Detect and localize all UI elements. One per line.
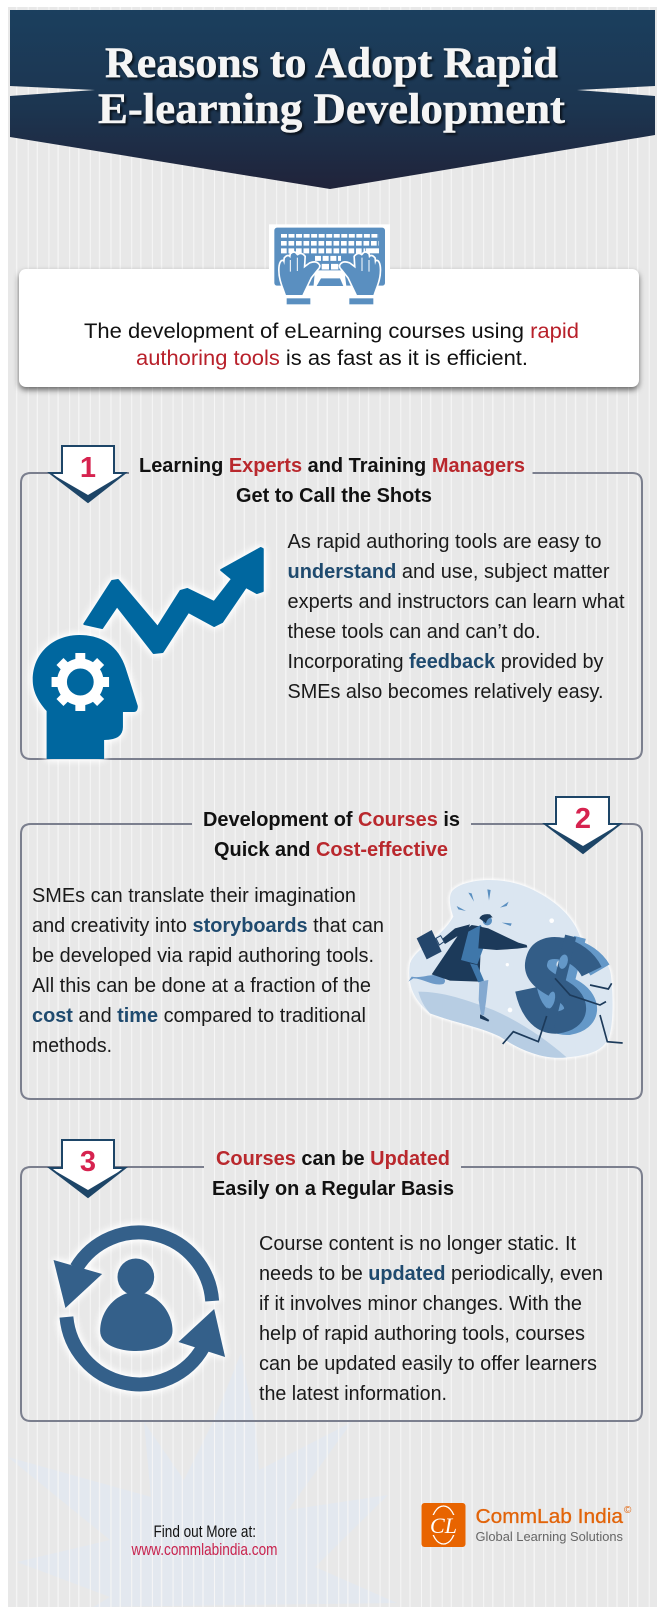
badge 2: 2 bbox=[575, 803, 591, 835]
panel 3: courses updated easily bbox=[21, 1140, 642, 1421]
body text 3: help of rapid authoring tools, courses bbox=[259, 1323, 585, 1345]
title banner bbox=[10, 10, 655, 189]
title: E-learning Development bbox=[98, 86, 566, 133]
heading 2: Development of Courses is bbox=[203, 809, 460, 831]
logo: CommLab India: Global Learning Solutions bbox=[476, 1529, 623, 1544]
body text 1: SMEs also becomes relatively easy. bbox=[288, 681, 604, 703]
logo: CommLab India: CommLab India bbox=[476, 1505, 624, 1528]
heading 2: Quick and Cost-effective bbox=[214, 839, 448, 861]
heading 1: Learning Experts and Training Managers bbox=[139, 455, 525, 477]
logo mark: CL bbox=[430, 1513, 457, 1538]
panel 2: courses quick and cost-effective bbox=[21, 797, 642, 1099]
badge 1: 1 bbox=[80, 452, 96, 484]
body text 3: can be updated easily to offer learners bbox=[259, 1353, 597, 1375]
body text 1: experts and instructors can learn what bbox=[288, 591, 625, 613]
dollar legs bbox=[503, 978, 623, 1044]
body text 2: methods. bbox=[32, 1035, 112, 1057]
panel 1: experts and managers bbox=[21, 446, 642, 759]
badge 1 bbox=[50, 446, 125, 503]
rays bbox=[457, 889, 512, 926]
icon: head with gear and rising arrow bbox=[33, 548, 263, 759]
body text 2: All this can be done at a fraction of the bbox=[32, 975, 371, 997]
icon: user with refresh arrows bbox=[54, 1232, 225, 1384]
illustration: woman chasing running dollar bbox=[408, 880, 623, 1058]
heading 3 bbox=[212, 1148, 454, 1200]
footer link: www.commlabindia.com bbox=[131, 1540, 278, 1559]
icon: keyboard with hands bbox=[269, 224, 390, 314]
body text 2: SMEs can translate their imagination bbox=[32, 885, 356, 907]
sparkles bbox=[506, 918, 554, 1012]
logo mark bbox=[422, 1503, 466, 1547]
body text 3: needs to be updated periodically, even bbox=[259, 1263, 603, 1285]
dollar bbox=[526, 936, 600, 1028]
badge 2 bbox=[545, 797, 620, 854]
heading 1: Get to Call the Shots bbox=[236, 485, 432, 507]
body text 2: and creativity into storyboards that can bbox=[32, 915, 384, 937]
body text 3: the latest information. bbox=[259, 1383, 447, 1405]
heading 2 bbox=[203, 809, 460, 861]
body text 2 bbox=[32, 885, 384, 1057]
title: Reasons to Adopt Rapid bbox=[105, 40, 558, 87]
body text 1 bbox=[288, 531, 625, 703]
intro box bbox=[19, 224, 639, 387]
body text 3 bbox=[259, 1233, 603, 1405]
footer link bbox=[131, 1522, 278, 1559]
heading 3: Courses can be Updated bbox=[216, 1148, 450, 1170]
badge 3 bbox=[50, 1140, 125, 1198]
badge 3: 3 bbox=[80, 1146, 96, 1178]
body text 1: As rapid authoring tools are easy to bbox=[288, 531, 602, 553]
heading 3: Easily on a Regular Basis bbox=[212, 1178, 454, 1200]
logo: CommLab India bbox=[422, 1503, 632, 1547]
body text 1: these tools can and can’t do. bbox=[288, 621, 540, 643]
body text 2: be developed via rapid authoring tools. bbox=[32, 945, 374, 967]
body text 3: Course content is no longer static. It bbox=[259, 1233, 576, 1255]
title bbox=[98, 40, 566, 133]
heading 1 bbox=[139, 455, 525, 507]
body text 1: Incorporating feedback provided by bbox=[288, 651, 604, 673]
body text 1: understand and use, subject matter bbox=[288, 561, 610, 583]
intro text: The development of eLearning courses using rapid bbox=[84, 320, 579, 343]
body text 3: if it involves minor changes. With the bbox=[259, 1293, 582, 1315]
footer link: Find out More at: bbox=[154, 1522, 256, 1541]
body text 2: cost and time compared to traditional bbox=[32, 1005, 366, 1027]
logo: CommLab India: © bbox=[624, 1505, 632, 1516]
intro text bbox=[84, 320, 579, 370]
woman bbox=[408, 914, 527, 1022]
intro text: authoring tools is as fast as it is efficient. bbox=[136, 347, 528, 370]
